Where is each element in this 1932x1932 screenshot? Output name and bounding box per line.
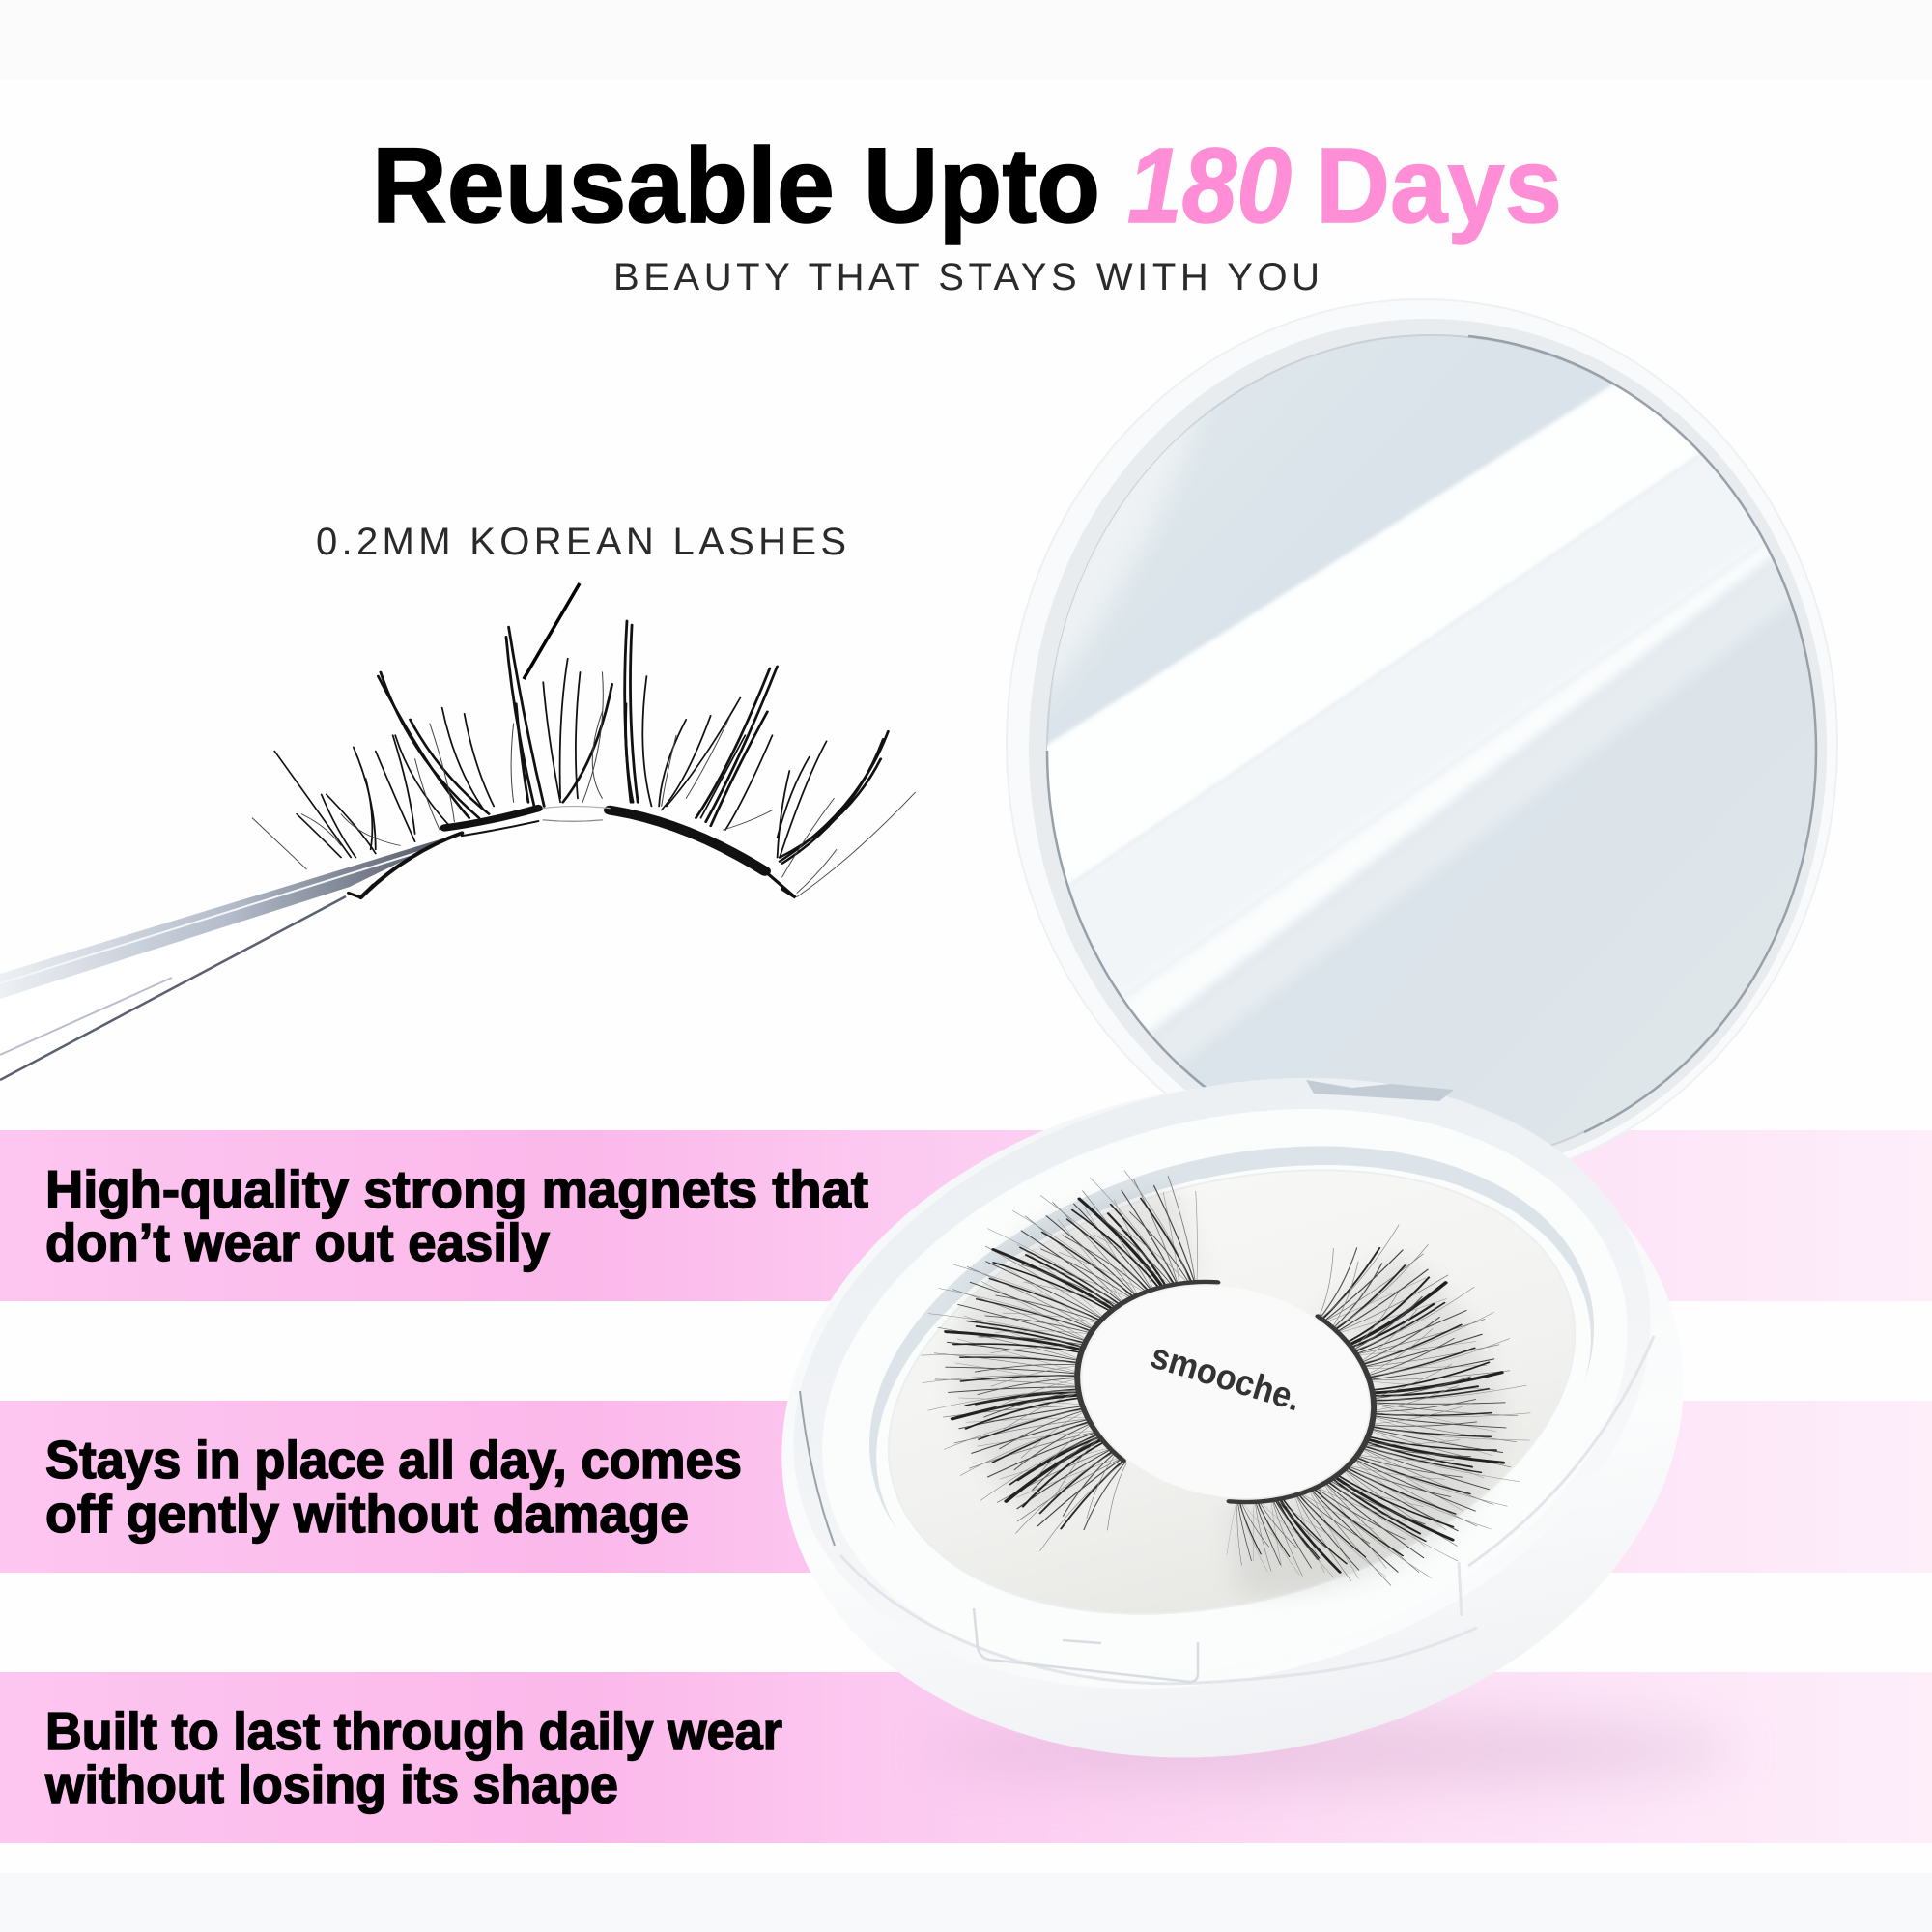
hinge — [1306, 1080, 1454, 1101]
mirror lid — [999, 299, 1837, 1198]
feature band 3 — [0, 1672, 1932, 1843]
right lash — [1207, 1192, 1574, 1628]
callout leader line — [524, 583, 580, 679]
case white rim — [758, 1024, 1691, 1758]
feature text 3: Built to last through daily wear — [45, 1701, 782, 1761]
case outer rim — [724, 986, 1719, 1780]
left lash — [879, 1119, 1245, 1586]
feature text 3: without losing its shape — [44, 1754, 618, 1814]
lower rim step — [840, 1336, 1654, 1684]
title: 180 — [1127, 127, 1292, 245]
feature text 2: off gently without damage — [45, 1484, 689, 1544]
mirror inner rim — [1029, 319, 1827, 1179]
lash callout label: 0.2MM KOREAN LASHES — [316, 521, 846, 563]
feature text 1: High-quality strong magnets that — [45, 1159, 868, 1219]
feature text 1 — [45, 1159, 868, 1272]
title: Days — [1316, 127, 1562, 245]
latch — [974, 1608, 1198, 1682]
case base — [727, 1013, 1738, 1827]
feature band 2 — [0, 1401, 1932, 1573]
title — [372, 127, 1562, 245]
feature band 1 — [0, 1130, 1932, 1301]
left rim dark edge — [800, 1391, 835, 1546]
mirror outer rim — [1007, 299, 1837, 1188]
feature text 2: Stays in place all day, comes — [45, 1430, 742, 1490]
mirror glass — [1047, 335, 1816, 1166]
feature text 3 — [44, 1701, 782, 1814]
tweezers — [0, 834, 459, 1080]
lash compact case — [724, 986, 1738, 1827]
single magnetic lash held by tweezers — [252, 621, 915, 897]
centre disc — [1063, 1260, 1389, 1524]
lash haze — [981, 1202, 1469, 1587]
grey channel — [815, 1070, 1648, 1702]
subtitle: BEAUTY THAT STAYS WITH YOU — [613, 256, 1320, 298]
mirror glass dark edge — [1047, 336, 1816, 1132]
feature text 1: don’t wear out easily — [45, 1212, 550, 1272]
mirror reflections — [1047, 384, 1789, 1066]
compact shadow — [927, 1718, 1739, 1783]
lash disc and lashes — [879, 1119, 1575, 1656]
brand name: smooche. — [1147, 1336, 1306, 1419]
feature text 2 — [45, 1430, 742, 1544]
title: Reusable Upto — [372, 127, 1100, 245]
lash tray well — [838, 1098, 1625, 1686]
white lip — [824, 1091, 1643, 1705]
